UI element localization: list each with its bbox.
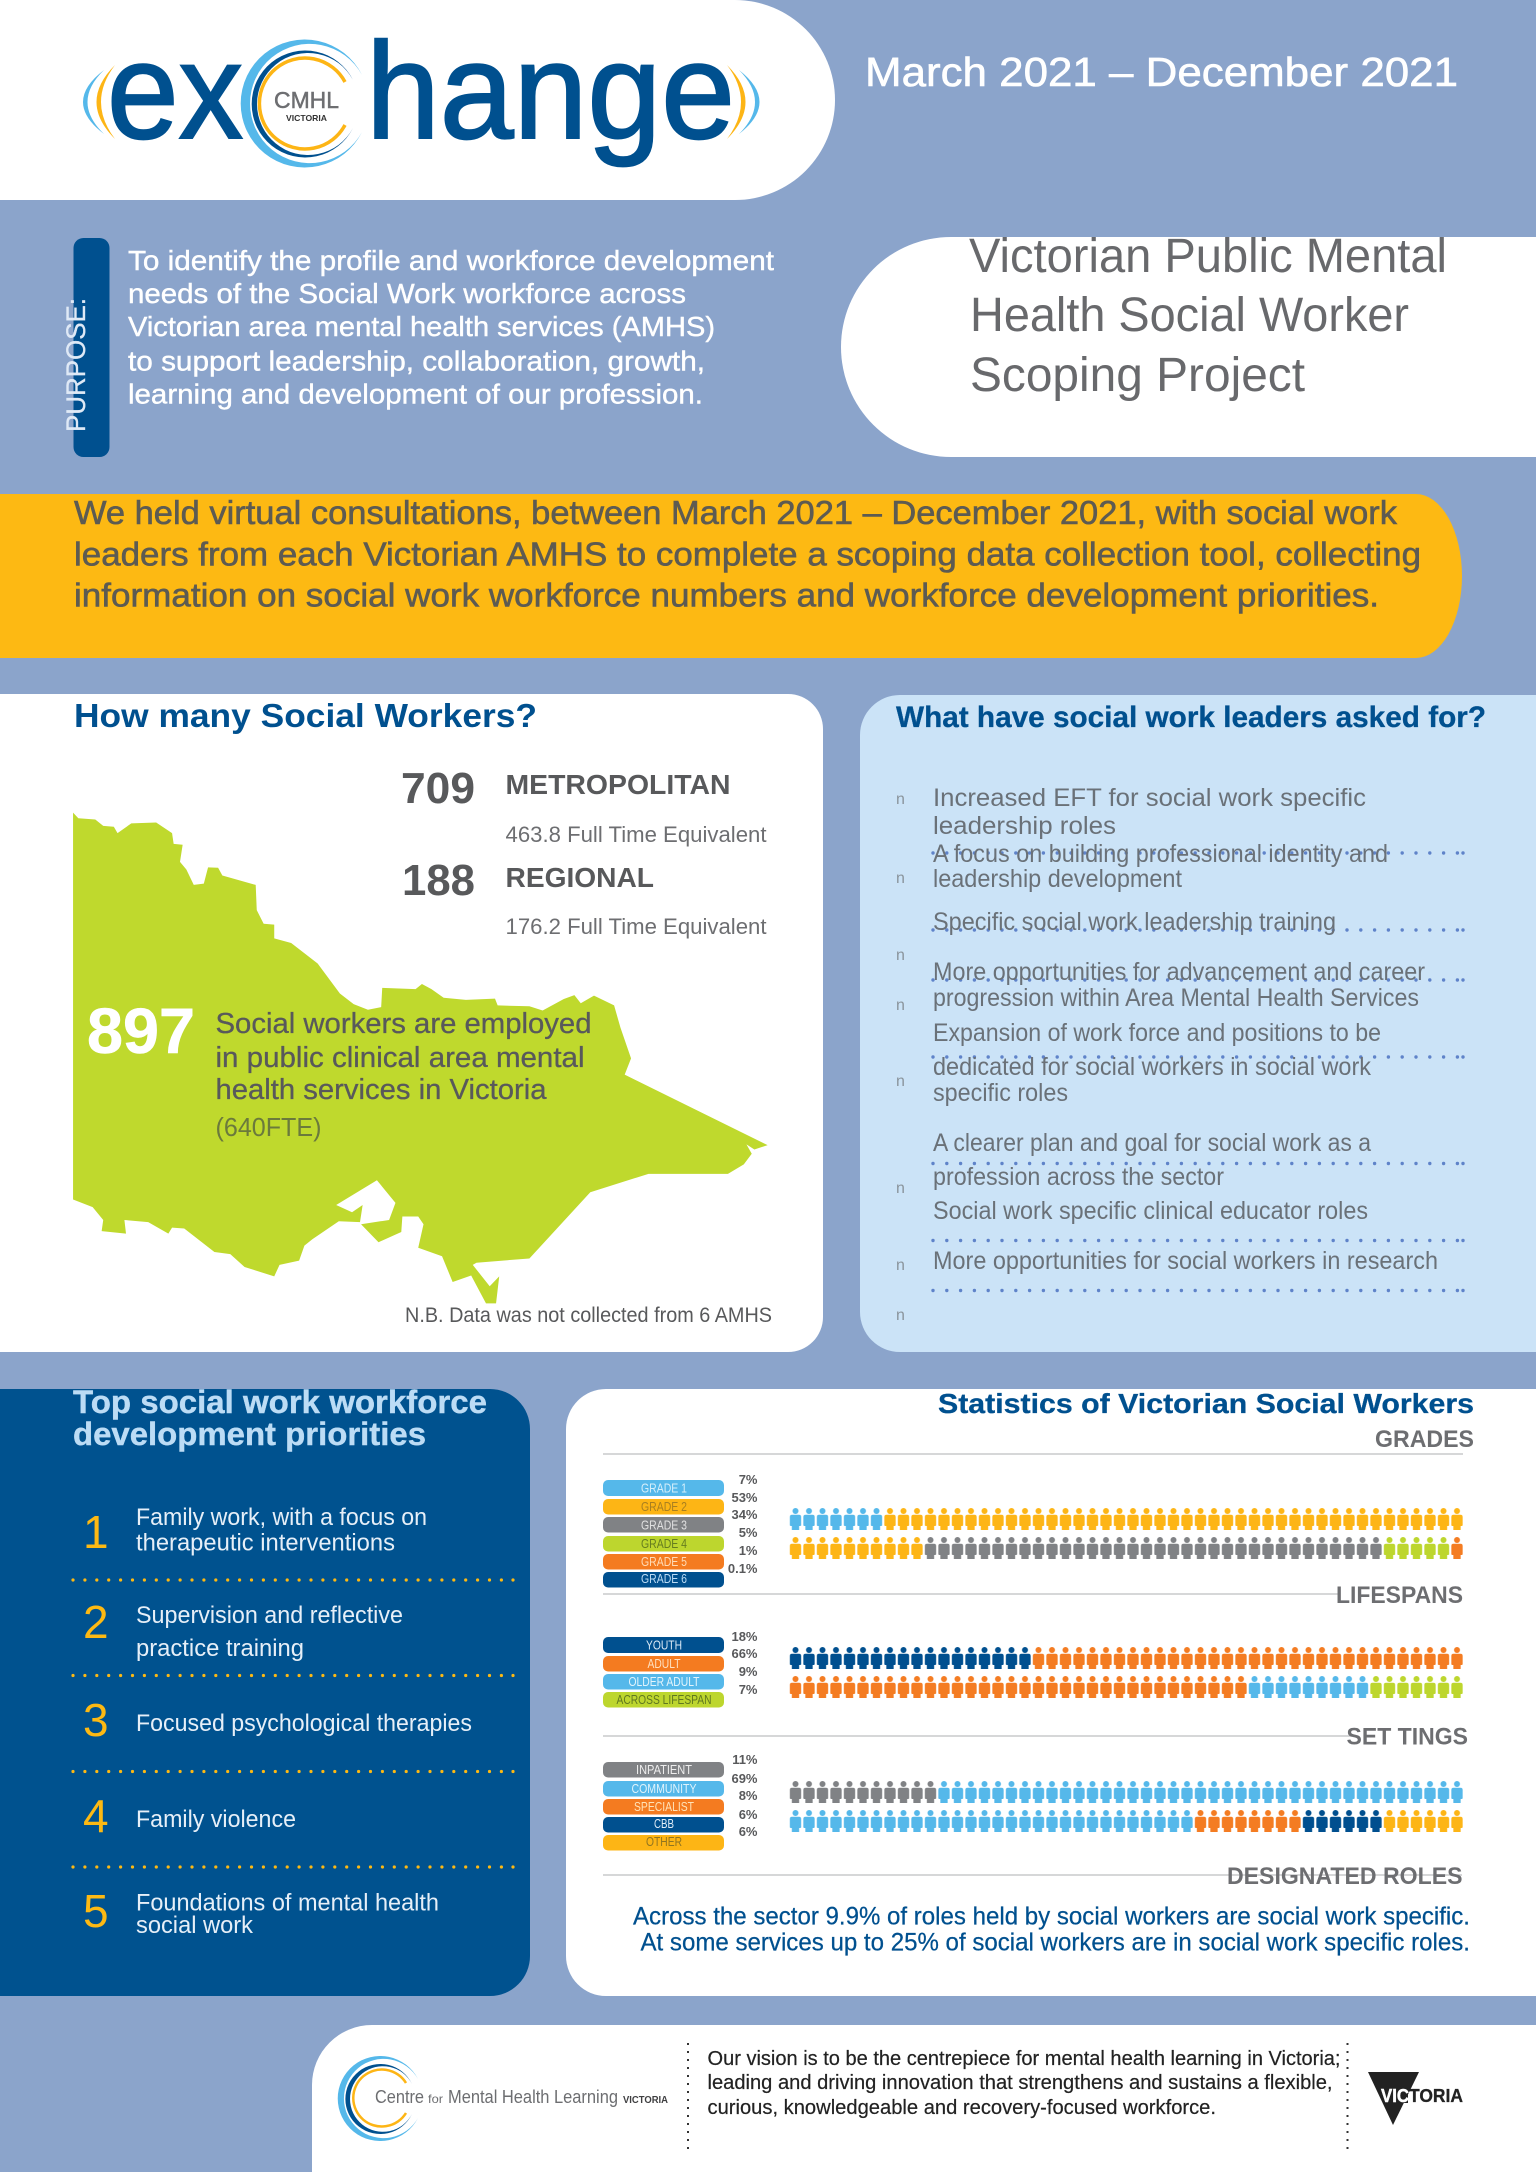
list: leader requests: A focus on building professional identity and [933, 840, 1388, 868]
priority 1: therapeutic interventions [136, 1530, 395, 1556]
priority 2: practice training [136, 1635, 304, 1662]
text: vision statement: leading and driving innovation that strengthens and sustains a flexible, [708, 2072, 1332, 2094]
stat: metropolitan: 709 [401, 764, 475, 813]
heading: priorities: Top social work workforce [73, 1384, 487, 1420]
pictogram: lifespans [789, 1647, 1464, 1698]
priority 2 [83, 1596, 403, 1662]
legend: lifespans: YOUTH [646, 1638, 682, 1652]
stat: 897 total: in public clinical area mental [216, 1042, 584, 1074]
stat: regional: REGIONAL [506, 862, 654, 893]
priority 2: 2 [83, 1596, 109, 1648]
list: leader requests: A clearer plan and goal for social work as a [933, 1129, 1371, 1157]
heading: how many social workers: How many Social Workers? [74, 697, 537, 734]
percentages: lifespans: 7% [739, 1682, 758, 1697]
purpose text: To identify the profile and workforce development [128, 245, 774, 276]
priority 1: Family work, with a focus on [136, 1504, 427, 1531]
priority 1 [83, 1504, 427, 1558]
panel: how many social workers [0, 694, 823, 1352]
stat: regional: 176.2 Full Time Equivalent [506, 914, 766, 939]
purpose text: needs of the Social Work workforce across [128, 278, 686, 309]
list: leader requests: Increased EFT for social work specific [933, 784, 1366, 812]
legend: grades: GRADE 6 [641, 1571, 687, 1586]
heading: priorities: development priorities [73, 1416, 426, 1452]
legend: grades: GRADE 2 [641, 1499, 687, 1514]
text: vision statement: Our vision is to be the centrepiece for mental health learning in Victoria; [708, 2048, 1340, 2070]
percentages: settings: 6% [739, 1824, 758, 1839]
panel: project title [841, 230, 1536, 457]
panel: purpose label: PURPOSE: [61, 298, 91, 432]
legend: grades: GRADE 5 [641, 1554, 687, 1569]
date range: March 2021 – December 2021 [865, 49, 1458, 95]
panel: what leaders asked for: n [896, 1307, 905, 1324]
legend: lifespans: ADULT [648, 1656, 681, 1671]
list: leader requests: leadership roles [933, 812, 1116, 840]
stat: regional: 188 [402, 856, 475, 905]
panel: top priorities [0, 1384, 530, 1996]
legend: settings: SPECIALIST [634, 1799, 694, 1814]
priority 4: 4 [83, 1790, 109, 1842]
percentages: grades: 7% [739, 1472, 758, 1487]
list: leader requests: More opportunities for advancement and career [933, 958, 1425, 986]
legend: settings: COMMUNITY [632, 1781, 697, 1796]
legend: settings [603, 1762, 724, 1850]
percentages: lifespans: 9% [739, 1664, 758, 1679]
panel: what leaders asked for: n [896, 997, 905, 1014]
percentages: settings: 11% [732, 1752, 758, 1767]
stat: 897 total [87, 995, 592, 1142]
priority 2: Supervision and reflective [136, 1602, 403, 1629]
panel: purpose label [61, 238, 110, 457]
percentages: settings: 8% [739, 1788, 758, 1803]
purpose text [128, 245, 774, 410]
legend: settings: CBB [654, 1816, 674, 1831]
legend: grades: GRADE 1 [641, 1480, 687, 1496]
text: designated roles: At some services up to 25% of social workers are in social work specific roles. [640, 1928, 1470, 1956]
stat: 897 total: (640FTE) [216, 1112, 322, 1142]
list: leader requests: leadership development [933, 865, 1182, 893]
percentages: grades: 34% [731, 1507, 758, 1522]
legend: lifespans [603, 1637, 724, 1708]
purpose text: Victorian area mental health services (AMHS) [128, 311, 715, 342]
section heading: grades: GRADES [1375, 1426, 1474, 1453]
logo: centre for mental health learning: VICTORIA [623, 2095, 668, 2106]
stat: 897 total: health services in Victoria [216, 1074, 547, 1106]
text: vision statement: curious, knowledgeable and recovery-focused workforce. [708, 2097, 1216, 2119]
list: leader requests [933, 784, 1438, 1275]
purpose text: learning and development of our profession. [128, 378, 703, 410]
panel: what leaders asked for: n [896, 947, 905, 964]
list: leader requests: specific roles [933, 1079, 1068, 1107]
percentages: settings [731, 1752, 758, 1839]
map of Victoria [73, 813, 768, 1303]
panel: what leaders asked for: n [896, 1257, 905, 1274]
stat: 897 total: Social workers are employed [216, 1008, 592, 1040]
priority 5 [83, 1885, 439, 1939]
percentages: grades: 1% [739, 1543, 758, 1558]
panel: footer [312, 2025, 1536, 2172]
heading: statistics: Statistics of Victorian Social Workers [938, 1388, 1474, 1419]
logo: exchange wordmark: hange [366, 15, 735, 168]
logo: exchange wordmark: VICTORIA [286, 113, 327, 123]
stat: regional [402, 856, 766, 939]
percentages: grades: 0.1% [728, 1561, 758, 1576]
panel: project title: Health Social Worker [970, 289, 1409, 342]
purpose text: to support leadership, collaboration, growth, [128, 346, 705, 376]
percentages: grades: 5% [739, 1525, 758, 1540]
legend: lifespans: ACROSS LIFESPAN [616, 1692, 712, 1707]
list: leader requests: profession across the sector [933, 1163, 1224, 1191]
panel: project title: Victorian Public Mental [969, 230, 1447, 283]
priority 3: 3 [83, 1694, 109, 1746]
panel: exchange logo header [0, 0, 835, 200]
section heading: lifespans: LIFESPANS [1336, 1582, 1463, 1609]
list: leader requests: Expansion of work force and positions to be [933, 1019, 1381, 1047]
priority 5: Foundations of mental health [136, 1890, 439, 1916]
text: vision statement [708, 2048, 1340, 2119]
panel: what leaders asked for: n [896, 1073, 905, 1090]
percentages: lifespans [731, 1629, 758, 1697]
logo: centre for mental health learning: Centre [375, 2087, 424, 2107]
list: leader requests: Specific social work leadership training [933, 908, 1336, 936]
heading: what have leaders asked for: What have social work leaders asked for? [896, 701, 1486, 734]
text: designated roles [633, 1902, 1470, 1956]
priority 3: Focused psychological therapies [136, 1710, 472, 1737]
heading: priorities [73, 1384, 487, 1452]
priority 4 [83, 1790, 296, 1842]
percentages: grades [728, 1472, 758, 1576]
list: leader requests: More opportunities for social workers in research [933, 1247, 1438, 1275]
panel: statistics [566, 1388, 1536, 1996]
logo: Victoria government: TORIA [1409, 2086, 1463, 2106]
stat: metropolitan: METROPOLITAN [506, 769, 730, 800]
panel: what leaders asked for: n [896, 870, 905, 887]
logo: exchange wordmark [83, 15, 760, 168]
logo: exchange wordmark: ex [107, 15, 243, 168]
priority 1: 1 [83, 1506, 109, 1558]
logo: exchange wordmark: CMHL [274, 87, 339, 113]
percentages: lifespans: 18% [731, 1629, 758, 1644]
percentages: settings: 69% [731, 1771, 758, 1786]
percentages: grades: 53% [731, 1490, 758, 1505]
pictogram: settings [789, 1781, 1464, 1832]
section heading: designated roles: DESIGNATED ROLES [1227, 1863, 1462, 1890]
logo: Victoria government [1368, 2072, 1463, 2125]
logo: centre for mental health learning: Mental Health Learning [448, 2087, 618, 2107]
list: leader requests: dedicated for social workers in social work [933, 1053, 1371, 1081]
legend: lifespans: OLDER ADULT [628, 1674, 700, 1689]
priority 5: 5 [83, 1885, 109, 1937]
legend: settings: INPATIENT [636, 1762, 692, 1777]
priority 5: social work [136, 1912, 254, 1939]
legend: settings: OTHER [646, 1834, 682, 1849]
legend: grades: GRADE 3 [641, 1518, 687, 1532]
logo: centre for mental health learning: for [428, 2092, 443, 2106]
list: leader requests: progression within Area Mental Health Services [933, 984, 1419, 1012]
panel: consultation banner: information on social work workforce numbers and workforce development priorities. [74, 576, 1379, 614]
panel: consultation banner: We held virtual consultations, between March 2021 – December 2021, with social work [74, 494, 1398, 531]
logo: Victoria government: VIC [1381, 2086, 1409, 2106]
panel: project title: Scoping Project [970, 349, 1305, 402]
panel: what leaders asked for: n [896, 791, 905, 808]
panel: what leaders asked for: n [896, 1180, 905, 1197]
pictogram: grades [789, 1508, 1464, 1559]
percentages: settings: 6% [739, 1807, 758, 1822]
priority 3 [83, 1694, 472, 1746]
logo: centre for mental health learning [338, 2056, 668, 2141]
footnote: N.B. Data was not collected from 6 AMHS [405, 1304, 772, 1327]
stat: 897 total: 897 [87, 995, 195, 1067]
stat: metropolitan [401, 764, 766, 847]
list: leader requests: Social work specific clinical educator roles [933, 1197, 1368, 1225]
section heading: settings: SET TINGS [1346, 1724, 1468, 1750]
text: designated roles: Across the sector 9.9% of roles held by social workers are social work specific. [633, 1902, 1470, 1930]
stat: metropolitan: 463.8 Full Time Equivalent [506, 822, 766, 847]
legend: grades [603, 1480, 724, 1588]
panel: consultation banner: leaders from each Victorian AMHS to complete a scoping data collection tool, collecting [74, 536, 1421, 572]
priority 4: Family violence [136, 1806, 296, 1833]
panel: what leaders asked for [860, 695, 1536, 1352]
legend: grades: GRADE 4 [641, 1536, 687, 1551]
panel: consultation banner [0, 494, 1462, 658]
percentages: lifespans: 66% [731, 1646, 758, 1661]
